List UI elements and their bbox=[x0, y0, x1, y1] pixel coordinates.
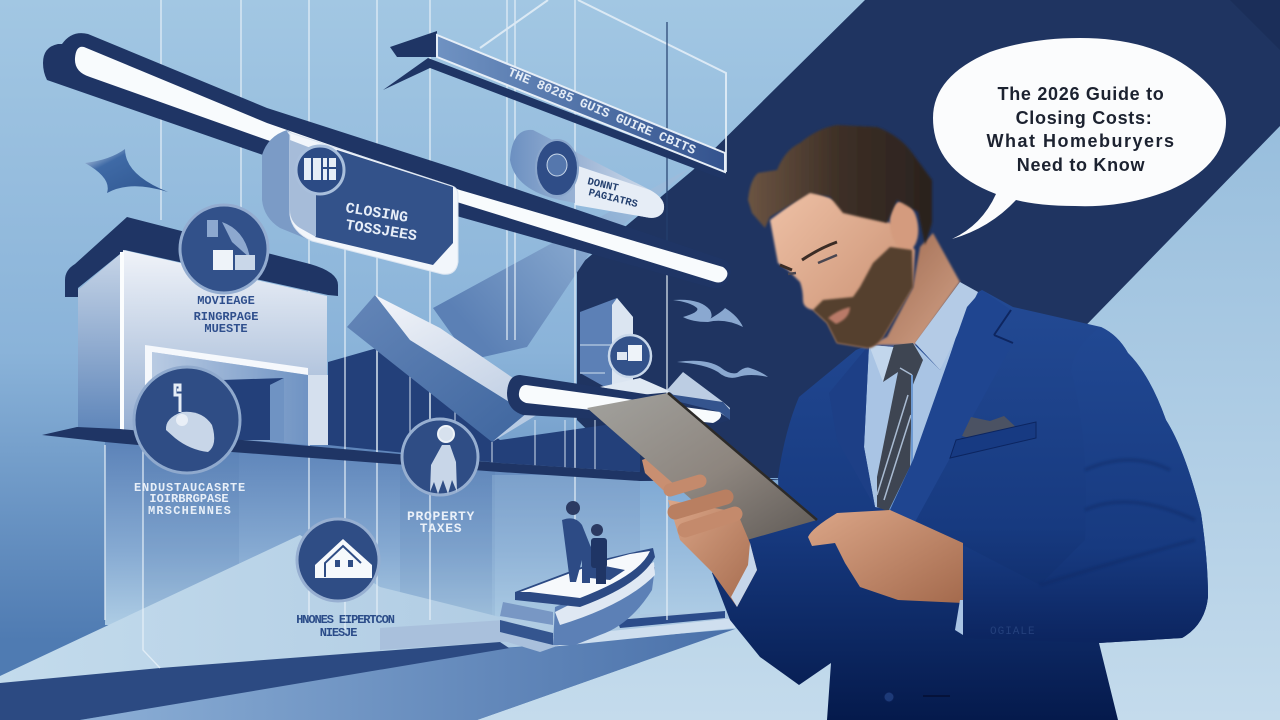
dark columns behind ramp bbox=[328, 348, 640, 472]
thin glass lines and frame bbox=[105, 0, 726, 668]
label: mortgage: MOVIEAGE bbox=[197, 294, 255, 308]
tie bbox=[877, 343, 923, 512]
star shape bbox=[85, 149, 168, 193]
bubble title: Need to Know bbox=[1017, 155, 1145, 175]
bubble title: What Homeburyers bbox=[986, 131, 1176, 151]
right hand bbox=[808, 510, 963, 603]
figures bbox=[562, 501, 625, 584]
ramp bbox=[347, 295, 600, 442]
label: insurance: IOIRBRGPASE bbox=[149, 492, 229, 506]
label: insurance bbox=[134, 481, 246, 518]
birds bbox=[673, 300, 768, 378]
closing sign bbox=[262, 130, 458, 274]
sign title: THE 80285 GUIS GUIRE CBITS bbox=[505, 65, 698, 158]
closing sign text: TOSSJEES bbox=[344, 217, 418, 245]
label: mortgage: MUESTE bbox=[204, 322, 248, 336]
camera tag text: PAGIATRS bbox=[587, 187, 639, 211]
bubble title: The 2026 Guide to bbox=[998, 84, 1164, 104]
pocket square bbox=[962, 416, 1019, 440]
left thumb bbox=[642, 457, 673, 490]
left hand bbox=[668, 481, 757, 607]
icon: property keys bbox=[402, 419, 478, 495]
right lapel bbox=[890, 290, 1013, 522]
top sign bbox=[383, 31, 725, 180]
label: property taxes: PROPERTY bbox=[407, 509, 475, 524]
right collar bbox=[915, 282, 978, 370]
side pillar with icon bbox=[580, 298, 672, 395]
shirt bbox=[864, 303, 967, 510]
label: mortgage: RINGRPAGE bbox=[194, 310, 258, 324]
icon: mortgage bbox=[180, 205, 268, 293]
button slit bbox=[923, 695, 950, 697]
label: property taxes bbox=[407, 509, 475, 536]
suit torso bbox=[712, 290, 1208, 720]
closing sign text bbox=[344, 200, 418, 245]
ear bbox=[887, 199, 921, 253]
hair bbox=[748, 125, 932, 245]
eyebrows bbox=[780, 242, 837, 270]
right cuff bbox=[955, 600, 963, 635]
closing sign icon bbox=[296, 146, 344, 194]
pillar circle icon bbox=[609, 335, 651, 377]
lower wall glass panels bbox=[105, 440, 830, 643]
neck bbox=[870, 233, 960, 345]
left cuff bbox=[731, 543, 757, 607]
label: property taxes: TAXES bbox=[420, 521, 462, 536]
lips bbox=[828, 307, 850, 324]
label: insurance: MRSCHENNES bbox=[148, 504, 232, 518]
sleeve brand text: OGIALE bbox=[990, 626, 1036, 638]
left lapel bbox=[829, 345, 875, 507]
icon: insurance hand bbox=[134, 367, 240, 473]
label: home inspection: HNONES EIPERTCON bbox=[296, 613, 395, 627]
bubble title: Closing Costs: bbox=[1016, 108, 1152, 128]
building bbox=[65, 217, 338, 445]
lower dark beam bbox=[42, 427, 790, 481]
face bbox=[770, 190, 915, 348]
pocket bbox=[950, 422, 1036, 458]
podium with figures bbox=[478, 501, 655, 652]
bubble title bbox=[986, 84, 1176, 175]
floor bbox=[0, 535, 830, 720]
closing sign text: CLOSING bbox=[344, 200, 409, 227]
tablet bbox=[587, 393, 817, 542]
camera tag text bbox=[586, 176, 639, 211]
beard bbox=[813, 247, 913, 348]
top light bar bbox=[43, 33, 731, 288]
man bbox=[587, 125, 1208, 720]
speech bubble bbox=[933, 38, 1226, 239]
label: home inspection: NIESJE bbox=[320, 626, 357, 640]
camera tag bbox=[510, 130, 664, 218]
left collar bbox=[869, 345, 894, 382]
camera tag text: DONNT bbox=[586, 176, 620, 195]
icon: home bbox=[297, 519, 379, 601]
small light bar bbox=[507, 372, 730, 425]
jacket button bbox=[884, 692, 894, 702]
right sleeve shading bbox=[963, 327, 1208, 643]
label: mortgage bbox=[194, 294, 258, 336]
label: insurance: ENDUSTAUCASRTE bbox=[134, 481, 246, 495]
eyes bbox=[788, 255, 837, 274]
label: home inspection bbox=[296, 613, 395, 640]
